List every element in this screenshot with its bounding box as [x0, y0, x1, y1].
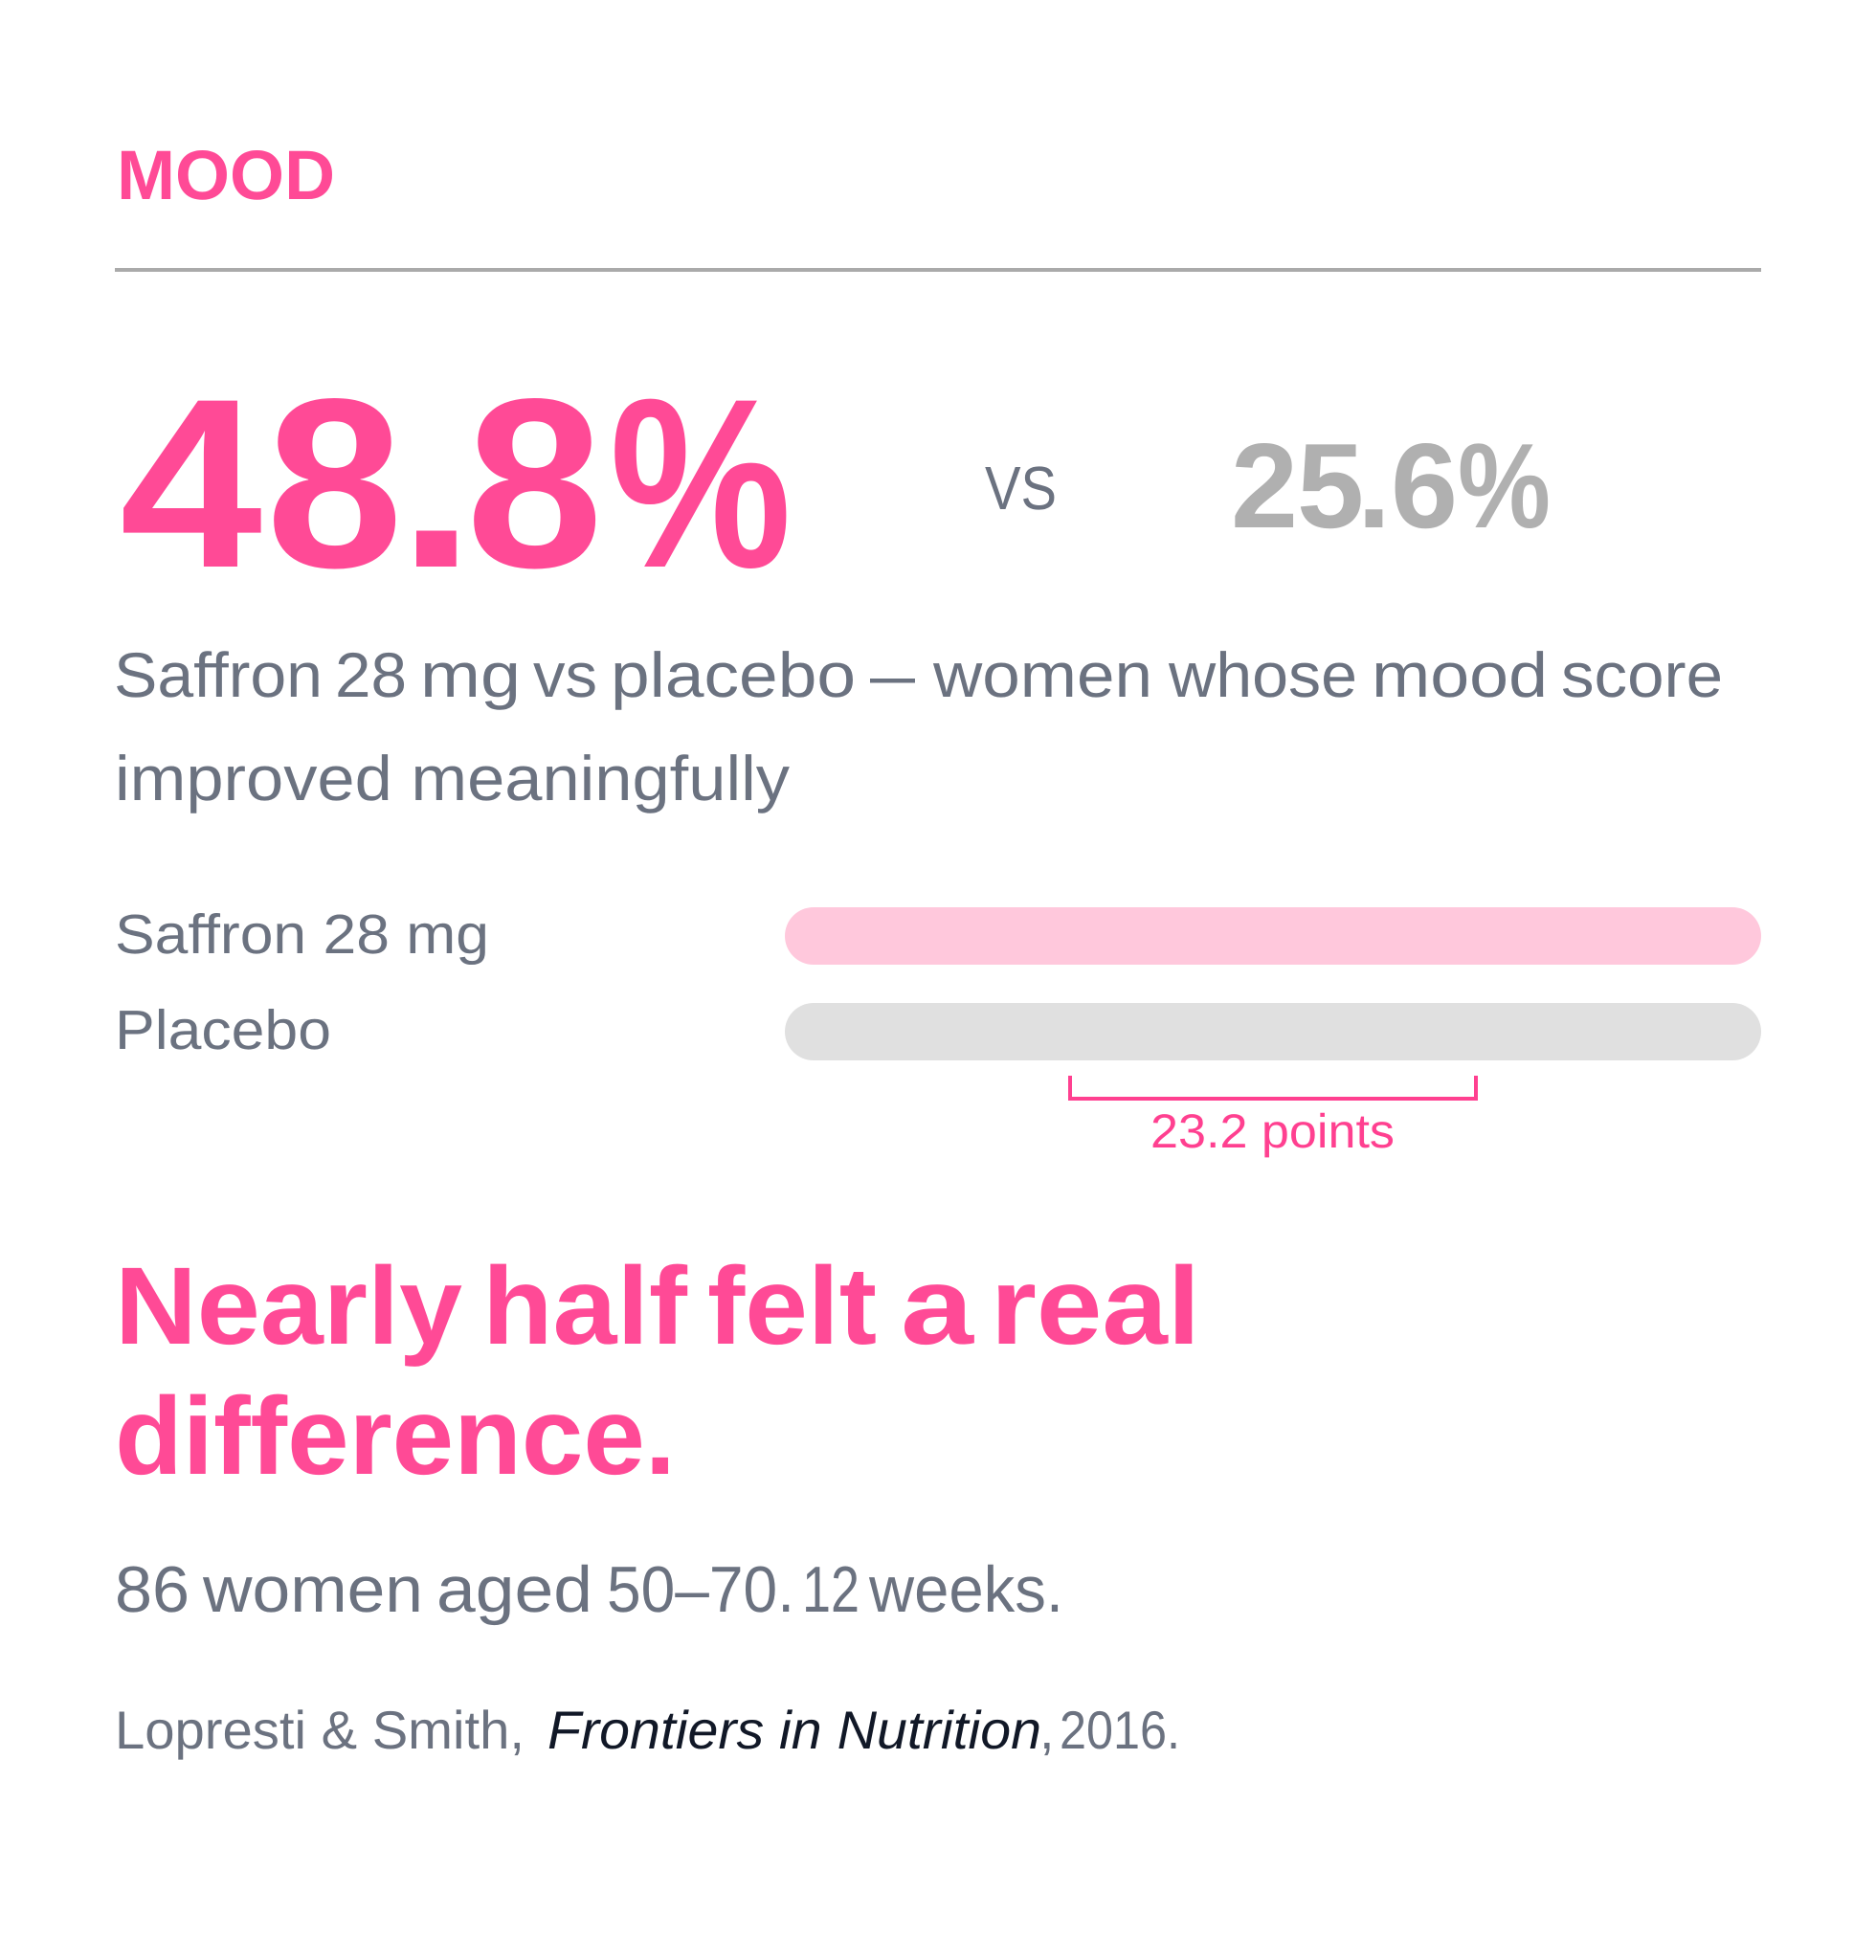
stat description: whose [1168, 639, 1357, 710]
saffron stat: 48.8%: 8 [266, 349, 403, 618]
stat description: mood [1372, 639, 1548, 710]
study details: 86 [115, 1553, 190, 1626]
stat description: vs [533, 639, 597, 710]
study details: women [202, 1553, 423, 1626]
study details: 12 [802, 1553, 860, 1626]
stat description: women [932, 639, 1152, 710]
stat description: placebo [611, 639, 856, 710]
stat description: 28 [335, 639, 407, 710]
headline: a [901, 1245, 974, 1368]
citation: Lopresti & Smith, [115, 1700, 525, 1760]
saffron stat: 48.8%: % [610, 349, 792, 618]
headline: half [482, 1245, 688, 1368]
stat description: improved meaningfully [115, 743, 790, 813]
citation: 2016. [1060, 1700, 1180, 1760]
stat description: mg [420, 639, 521, 710]
stat description: Saffron [114, 639, 323, 710]
vs label: VS [985, 454, 1057, 523]
placebo stat: 25.6%: 25.6 [1231, 418, 1458, 553]
header rule [115, 268, 1761, 272]
stat description: score [1561, 639, 1723, 710]
study details: weeks. [868, 1553, 1063, 1626]
citation [115, 1700, 1180, 1760]
headline [115, 1245, 1200, 1498]
study details: aged [436, 1553, 592, 1626]
bar row: saffron [115, 903, 1761, 966]
difference bracket [1070, 1076, 1476, 1099]
headline: difference. [115, 1375, 676, 1498]
stat description [114, 639, 1723, 813]
saffron stat: 48.8%: . [397, 349, 476, 618]
bar row: placebo [115, 999, 1761, 1061]
bracket label: 23.2 points [1150, 1104, 1395, 1158]
citation: Frontiers in Nutrition [547, 1700, 1041, 1760]
stat comparison [120, 349, 1551, 618]
citation: , [1039, 1700, 1055, 1760]
study details: 50–70. [607, 1553, 794, 1626]
saffron stat: 48.8%: 4 [120, 349, 262, 618]
heading: MOOD: MOOD [117, 137, 335, 214]
headline: real [991, 1245, 1200, 1368]
stat description: — [870, 639, 915, 710]
bar chart [115, 903, 1761, 1158]
headline: felt [707, 1245, 877, 1368]
bar row: saffron: Saffron 28 mg [115, 903, 489, 966]
bar row: placebo: Placebo [115, 999, 331, 1061]
headline: Nearly [115, 1245, 462, 1368]
saffron stat: 48.8%: 8 [466, 349, 603, 618]
placebo stat: 25.6%: % [1458, 418, 1551, 553]
